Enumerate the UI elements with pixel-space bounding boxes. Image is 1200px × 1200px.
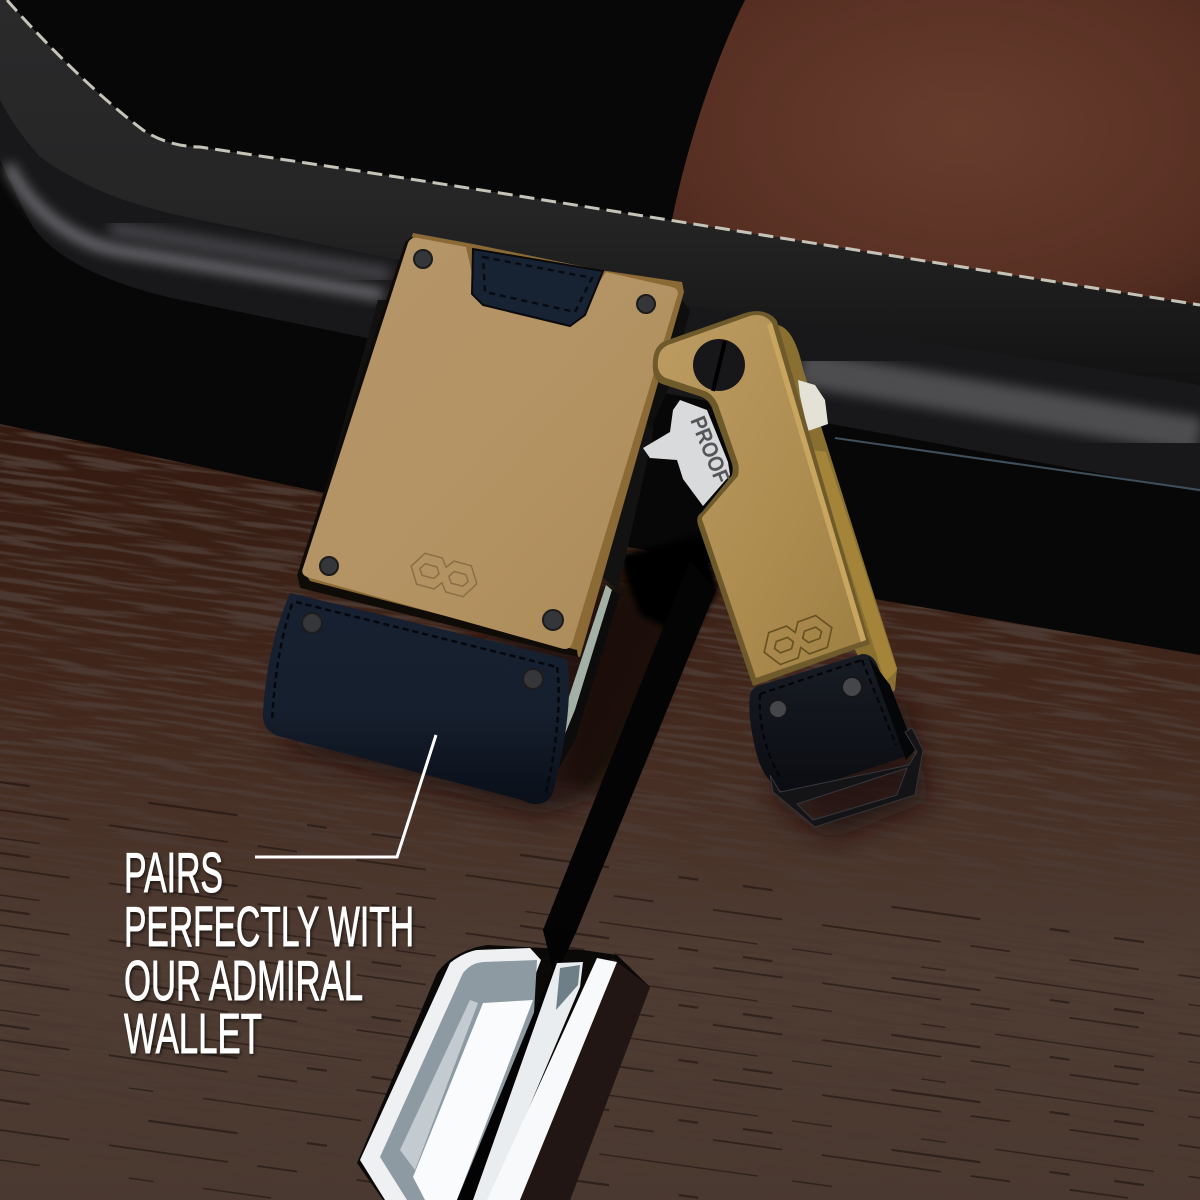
wood panel gap xyxy=(543,560,716,973)
knife side edge xyxy=(778,325,897,700)
navy leather top tab xyxy=(472,249,603,326)
dark right panel xyxy=(515,958,650,1200)
brown leather seat xyxy=(670,0,1200,320)
card stack edge xyxy=(550,585,612,756)
knife gold body xyxy=(658,315,866,678)
shadow under products xyxy=(275,580,930,840)
right chrome xyxy=(473,962,583,1200)
navy leather bottom pull xyxy=(263,593,569,804)
logo on plate xyxy=(407,551,481,599)
admiral wallet xyxy=(263,233,690,804)
navy leather strap xyxy=(749,654,915,795)
callout text xyxy=(124,841,414,1066)
white stitching xyxy=(7,0,1200,305)
black recess behind knife xyxy=(618,535,718,640)
pivot screw xyxy=(693,339,745,391)
glossy lower trim with reflection xyxy=(0,100,1200,492)
white bar xyxy=(487,958,617,1200)
white pocket clip xyxy=(798,380,828,431)
center strip xyxy=(457,930,577,1200)
wood surface xyxy=(0,424,1200,1200)
strap screws xyxy=(769,677,862,718)
elastic band side xyxy=(600,395,655,590)
inner white floor xyxy=(413,1000,533,1200)
knife logo xyxy=(758,612,838,668)
callout text: PAIRS xyxy=(124,841,223,905)
PROOF mark on blade: PROOF xyxy=(685,413,735,487)
callout text: PERFECTLY WITH xyxy=(124,895,414,959)
dark reflection beside wallet xyxy=(560,540,700,790)
white blade xyxy=(643,400,730,506)
tan metal plate xyxy=(302,238,678,649)
black key ring xyxy=(770,728,923,827)
knife gold body outline xyxy=(653,311,870,686)
plate left and bottom black edge xyxy=(297,236,578,657)
callout text: WALLET xyxy=(124,1002,262,1066)
white rim xyxy=(360,948,541,1200)
inner chrome xyxy=(380,960,537,1200)
proof knife xyxy=(643,311,923,827)
callout leader line xyxy=(255,735,436,857)
wallet screws xyxy=(302,250,655,689)
chrome cup holder trim xyxy=(357,930,650,1200)
black leather armrest band xyxy=(0,0,1200,385)
holder outer edge xyxy=(357,945,650,1200)
callout text: OUR ADMIRAL xyxy=(124,949,363,1013)
tan metal plate back edge xyxy=(297,233,684,657)
